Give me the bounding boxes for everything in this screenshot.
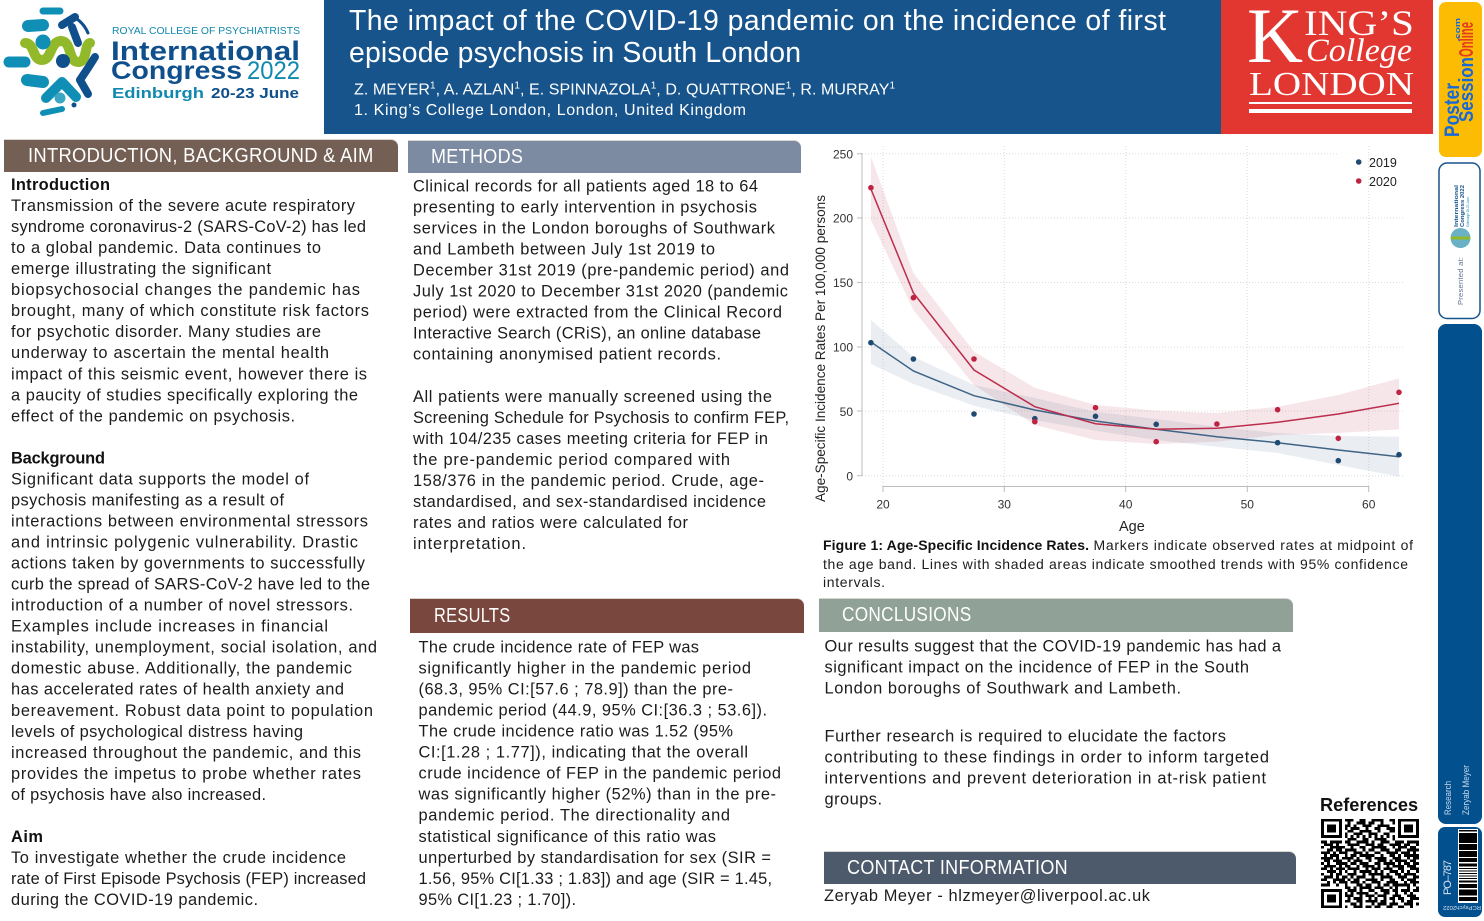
confidence band 2020 (871, 157, 1399, 444)
text: contact details: Zeryab Meyer - hlzmeyer@liverpool.ac.uk (824, 887, 1151, 905)
figure caption: Figure 1: Age-Specific Incidence Rates. (823, 537, 1089, 553)
text: methods: July 1st 2020 to December 31st 2020 (pandemic (413, 283, 788, 301)
y axis tick labels: 50 (840, 405, 853, 419)
authors: 1 (514, 80, 520, 92)
text: results: statistical significance of this ratio was (418, 828, 716, 846)
sidebar: author tab: Research (1443, 781, 1454, 815)
text: methods: services in the London boroughs of Southwark (413, 220, 776, 238)
y axis tick labels: 200 (833, 212, 853, 226)
text: methods: Clinical records for all patients aged 18 to 64 (413, 178, 758, 196)
legend (1356, 156, 1397, 189)
authors: 1 (651, 80, 657, 92)
text: methods: Screening Schedule for Psychosis to confirm FEP, (413, 409, 789, 427)
text: further research (824, 728, 1269, 809)
legend: 2020 (1369, 175, 1397, 189)
congress logo: 2022 (247, 57, 300, 85)
text: conclusions: significant impact on the incidence of FEP in the South (824, 658, 1249, 676)
sidebar: author tab: Zeryab Meyer (1461, 765, 1472, 815)
kings college london logo (1221, 0, 1433, 134)
sidebar: presented at tab: Congress 2022 (1460, 185, 1466, 227)
text: conclusions: Our results suggest that the COVID-19 pandemic has had a (824, 638, 1282, 656)
text: introduction, background and aim: Significant data supports the model of (11, 470, 309, 488)
text: further research: groups. (824, 791, 882, 809)
authors: 1 (430, 80, 436, 92)
text: introduction, background and aim: increased throughout the pandemic, and this (11, 744, 361, 762)
y axis tick labels: 0 (846, 470, 853, 484)
text: introduction, background and aim: has accelerated rates of health anxiety and (11, 681, 344, 699)
sidebar: presented at tab: Edinburgh 20-23 June (1465, 196, 1470, 227)
text: introduction, background and aim: actions taken by governments to successfully (11, 554, 366, 572)
qr code (1321, 819, 1419, 908)
section heading: contact information (824, 852, 1296, 884)
text: results: crude incidence of FEP in the pandemic period (418, 765, 781, 783)
text: introduction, background and aim: effect of the pandemic on psychosis. (11, 407, 295, 425)
text: methods: containing anonymised patient records. (413, 346, 721, 364)
text: introduction, background and aim: to a global pandemic. Data continues to (11, 239, 321, 257)
legend: 2019 (1369, 156, 1397, 170)
poster title: episode psychosis in South London (349, 37, 801, 69)
markers 2019 (868, 340, 1402, 464)
text: introduction, background and aim: impact of this seismic event, however there is (11, 365, 367, 383)
text: introduction, background and aim: rate of First Episode Psychosis (FEP) increased (11, 870, 366, 888)
x axis tick labels: 60 (1362, 498, 1376, 512)
text: methods: and Lambeth between July 1st 2019 to (413, 241, 715, 259)
section heading: methods (408, 141, 801, 173)
text: further research: interventions and prevent deterioration in at-risk patient (824, 770, 1266, 788)
y axis title: Age-Specific Incidence Rates Per 100,000 persons (812, 195, 828, 502)
text: introduction, background and aim (11, 176, 377, 909)
text: results (418, 638, 781, 909)
poster title (349, 5, 1166, 69)
authors: , A. AZLAN (436, 82, 514, 98)
kings college london logo: LONDON (1249, 66, 1414, 103)
text: methods: 158/376 in the pandemic period. Crude, age- (413, 472, 764, 490)
congress logo: 20-23 June (211, 85, 299, 102)
congress logo: International (111, 36, 300, 66)
text: introduction, background and aim: psychosis manifesting as a result of (11, 492, 284, 510)
figure caption: Markers indicate observed rates at midpoint of (1094, 537, 1413, 553)
text: methods: December 31st 2019 (pre-pandemic period) and (413, 262, 789, 280)
text: introduction, background and aim: of psychosis have also increased. (11, 786, 266, 804)
trend line 2020 (871, 189, 1399, 429)
text: introduction, background and aim: Examples include increases in financial (11, 618, 328, 636)
header band (324, 0, 1221, 134)
text: introduction, background and aim: syndrome coronavirus-2 (SARS-CoV-2) has led (11, 218, 366, 236)
authors: Z. MEYER (354, 82, 430, 98)
text: results: CI:[1.28 ; 1.77]), indicating that the overall (418, 744, 748, 762)
text: results: 1.56, 95% CI[1.33 ; 1.83]) and age (SIR = 1.45, (418, 870, 772, 888)
x axis tick labels (876, 498, 1376, 512)
text: introduction, background and aim: underway to ascertain the mental health (11, 344, 329, 362)
confidence band 2019 (871, 320, 1399, 477)
text: conclusions (824, 638, 1282, 698)
text: further research: Further research is required to elucidate the factors (824, 728, 1226, 746)
authors: , E. SPINNAZOLA (520, 82, 651, 98)
authors: 1 (889, 80, 895, 92)
kings college london logo: College (1306, 33, 1412, 69)
sidebar: author tab (1438, 324, 1482, 824)
section heading: introduction: INTRODUCTION, BACKGROUND & AIM (28, 145, 374, 167)
sidebar: poster number and barcode (1438, 827, 1482, 917)
text: introduction, background and aim: brought, many of which constitute risk factors (11, 302, 369, 320)
authors: 1. King’s College London, London, United Kingdom (354, 102, 746, 119)
poster title: The impact of the COVID-19 pandemic on the incidence of first (349, 5, 1166, 37)
y axis tick labels: 100 (833, 340, 853, 354)
text: methods: rates and ratios were calculated for (413, 514, 689, 532)
congress logo (4, 8, 300, 116)
sidebar: poster number and barcode: PO–787 (1442, 860, 1454, 895)
x axis tick labels: 40 (1119, 498, 1133, 512)
section heading: introduction (4, 140, 398, 172)
authors (354, 80, 895, 119)
figure caption: intervals. (823, 574, 885, 590)
sidebar: poster session online tab (1439, 2, 1482, 157)
figure caption (823, 537, 1414, 590)
text: introduction, background and aim: To investigate whether the crude incidence (11, 849, 346, 867)
sidebar: poster session online tab: Poster (1441, 83, 1464, 137)
section heading: results: RESULTS (434, 605, 510, 627)
text: results: pandemic period (44.9, 95% CI:[36.3 ; 53.6]). (418, 702, 767, 720)
y axis tick labels (833, 148, 853, 484)
authors: 1 (786, 80, 792, 92)
text: introduction, background and aim: Introduction (11, 176, 110, 194)
text: introduction, background and aim: Aim (11, 828, 43, 846)
text: introduction, background and aim: for psychotic disorder. Many studies are (11, 323, 321, 341)
x axis tick labels: 50 (1241, 498, 1254, 512)
sidebar: poster session online tab: .com (1455, 18, 1462, 42)
text: results: pandemic period. The directionality and (418, 807, 730, 825)
y axis tick labels: 150 (833, 276, 853, 290)
text: results: The crude incidence rate of FEP was (418, 638, 699, 656)
text: methods: presenting to early intervention in psychosis (413, 198, 757, 216)
section heading: conclusions: CONCLUSIONS (842, 604, 971, 626)
text: results: (68.3, 95% CI:[57.6 ; 78.9]) than the pre- (418, 681, 733, 699)
sidebar: presented at tab (1438, 162, 1481, 320)
text: introduction, background and aim: and intrinsic polygenic vulnerability. Drastic (11, 534, 358, 552)
text: methods: standardised, and sex-standardised incidence (413, 493, 766, 511)
text: introduction, background and aim: Transmission of the severe acute respiratory (11, 197, 356, 215)
text: methods: the pre-pandemic period compared with (413, 451, 730, 469)
text: introduction, background and aim: bereavement. Robust data point to population (11, 702, 373, 720)
text: results: significantly higher in the pandemic period (418, 660, 751, 678)
text: introduction, background and aim: provides the impetus to probe whether rates (11, 765, 361, 783)
sidebar: poster session online tab: Session (1456, 57, 1478, 122)
section heading: results (410, 599, 804, 633)
text: methods (412, 178, 789, 553)
references heading: References (1320, 795, 1418, 815)
authors: , R. MURRAY (791, 82, 890, 98)
text: introduction, background and aim: during the COVID-19 pandemic. (11, 891, 258, 909)
sidebar: presented at tab: Presented at: (1456, 257, 1465, 305)
text: results: The crude incidence ratio was 1.52 (95% (418, 723, 733, 741)
text: further research: contributing to these findings in order to inform targeted (824, 748, 1269, 766)
figure caption: the age band. Lines with shaded areas indicate smoothed trends with 95% confidence (823, 556, 1408, 572)
section heading: conclusions (819, 599, 1293, 632)
x axis tick labels: 30 (998, 498, 1011, 512)
authors: , D. QUATTRONE (656, 82, 786, 98)
markers 2020 (868, 185, 1402, 445)
congress logo: ROYAL COLLEGE OF PSYCHIATRISTS (112, 25, 300, 37)
text: introduction, background and aim: domestic abuse. Additionally, the pandemic (11, 660, 352, 678)
text: methods: Interactive Search (CRiS), an online database (413, 325, 761, 343)
text: methods: with 104/235 cases meeting criteria for FEP in (412, 430, 768, 448)
text: introduction, background and aim: Background (11, 449, 105, 467)
sidebar: presented at tab: International (1454, 184, 1460, 227)
x axis title: Age (1119, 519, 1145, 535)
text: results: was significantly higher (52%) than in the pre- (418, 786, 776, 804)
y axis tick labels: 250 (833, 148, 853, 162)
text: results: unperturbed by standardisation for sex (SIR = (418, 849, 771, 867)
text: results: 95% CI[1.23 ; 1.70]). (418, 891, 576, 909)
congress logo: Edinburgh (112, 85, 204, 102)
section heading: methods: METHODS (431, 146, 523, 168)
sidebar: poster number and barcode: RCPsych2022 (1443, 904, 1481, 910)
text: conclusions: London boroughs of Southwark and Lambeth. (824, 680, 1181, 698)
section heading: contact information: CONTACT INFORMATION (847, 857, 1068, 879)
text: introduction, background and aim: introduction of a number of novel stressors. (11, 597, 353, 615)
text: introduction, background and aim: interactions between environmental stressors (11, 512, 368, 530)
text: introduction, background and aim: instability, unemployment, social isolation, and (11, 639, 377, 657)
text: introduction, background and aim: levels of psychological distress having (11, 723, 303, 741)
text: methods: period) were extracted from the Clinical Record (413, 304, 782, 322)
kings college london logo: ING’S (1304, 3, 1414, 43)
text: methods: All patients were manually screened using the (413, 388, 772, 406)
trend line 2019 (871, 342, 1399, 457)
text: introduction, background and aim: emerge illustrating the significant (11, 260, 271, 278)
x axis tick labels: 20 (876, 498, 890, 512)
text: methods: interpretation. (413, 535, 526, 553)
text: introduction, background and aim: curb the spread of SARS-CoV-2 have led to the (11, 576, 370, 594)
text: introduction, background and aim: biopsychosocial changes the pandemic has (11, 281, 360, 299)
congress logo: Congress (111, 57, 242, 85)
text: introduction, background and aim: a paucity of studies specifically exploring the (11, 386, 358, 404)
